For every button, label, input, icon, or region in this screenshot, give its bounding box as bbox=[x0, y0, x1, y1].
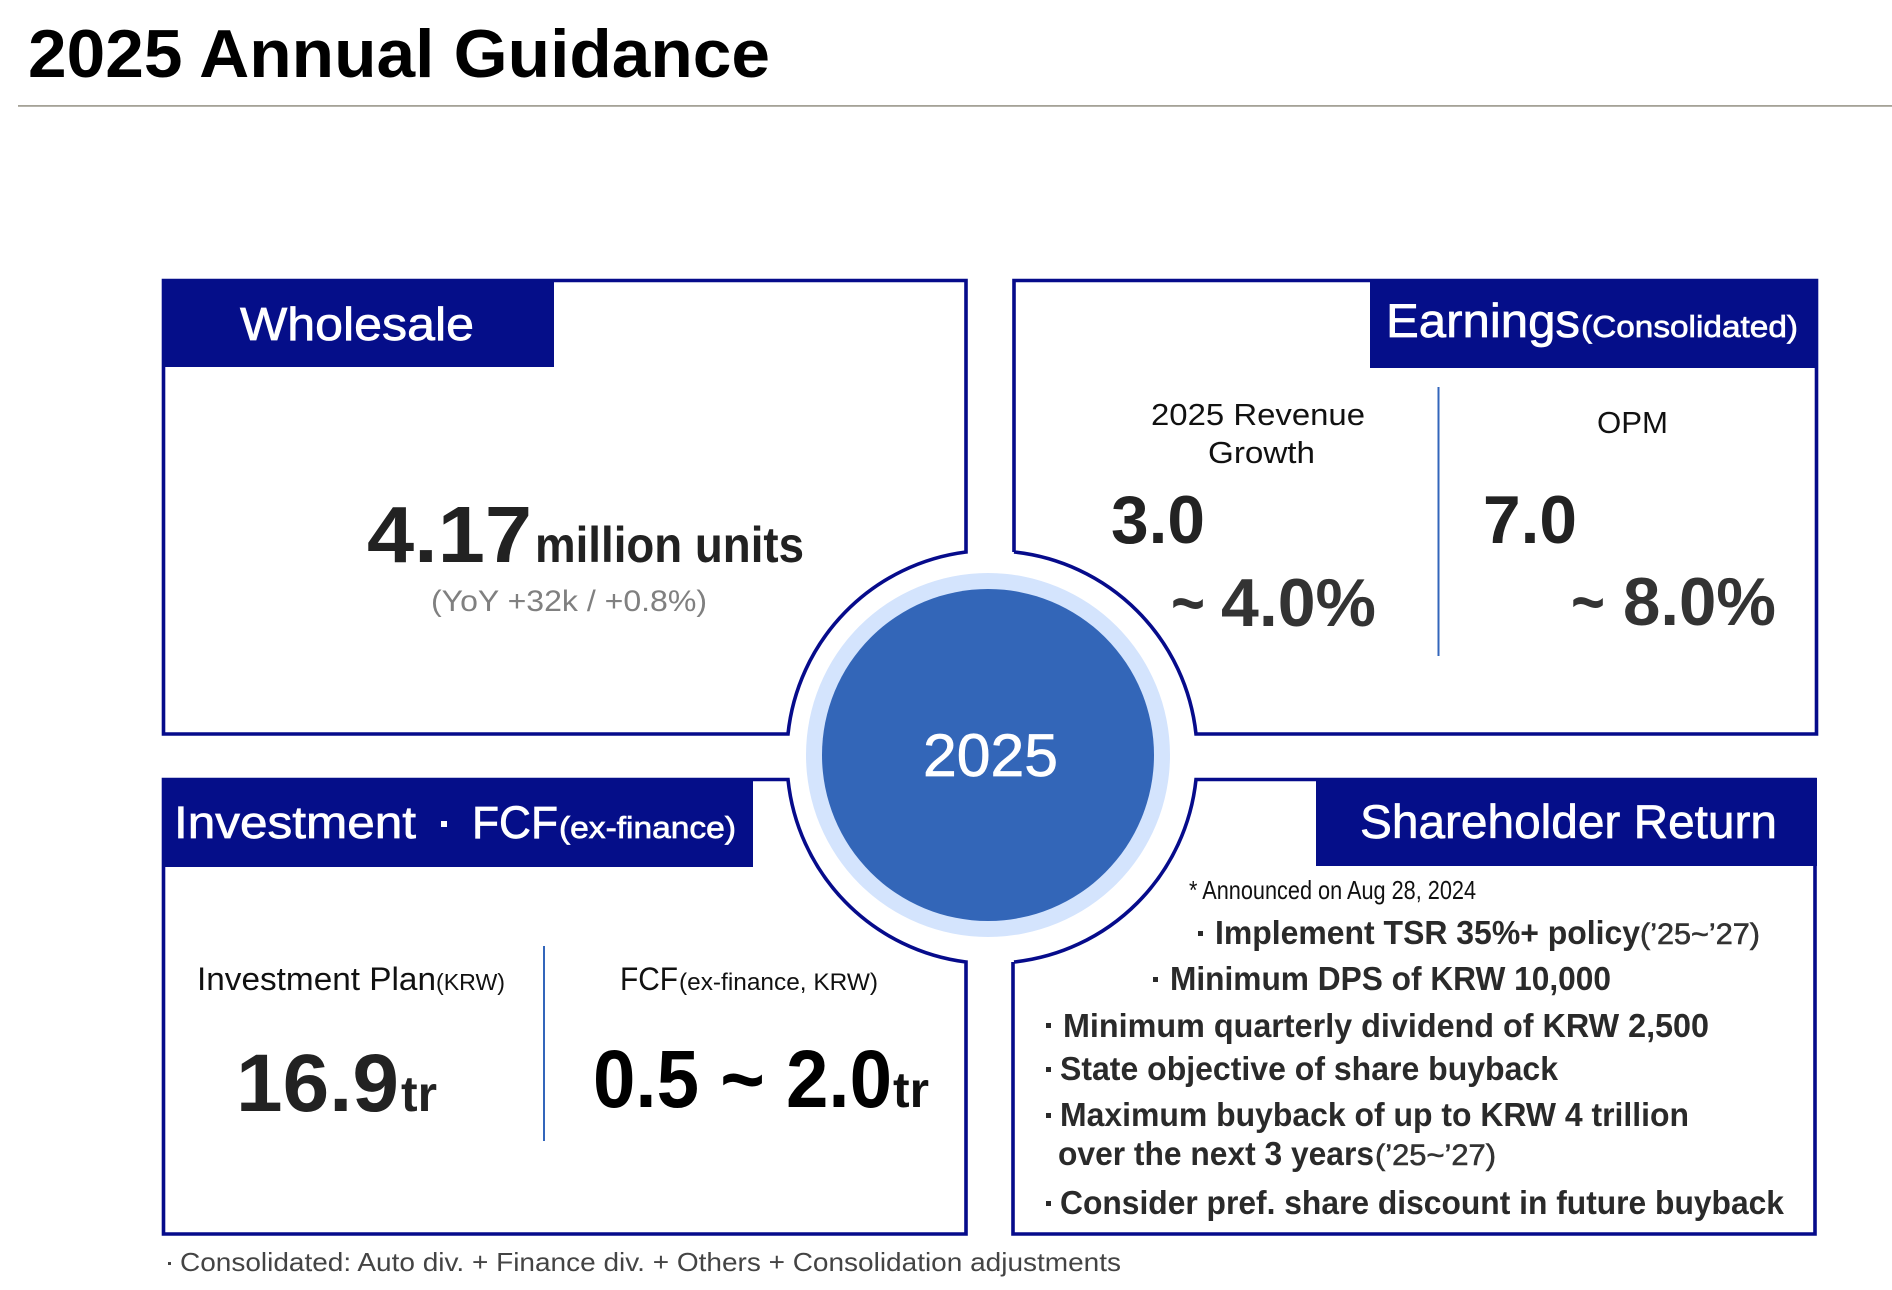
panel: earnings bbox=[1014, 279, 1818, 734]
earnings header bbox=[1370, 279, 1818, 368]
revenue growth label: 2025 Revenue bbox=[1151, 397, 1365, 432]
revenue growth value: 4.0% bbox=[1221, 565, 1376, 641]
revenue growth label bbox=[1151, 397, 1365, 470]
shareholder header: Shareholder Return bbox=[1360, 795, 1777, 848]
item: maximum buyback: over the next 3 years bbox=[1058, 1135, 1374, 1172]
OPM value: 7.0 bbox=[1483, 482, 1577, 558]
revenue growth value bbox=[1111, 482, 1376, 641]
FCF value: tr bbox=[893, 1062, 929, 1118]
investment header: FCF bbox=[472, 797, 558, 848]
investment plan value: 16.9 bbox=[236, 1038, 399, 1129]
investment plan label: (KRW) bbox=[436, 969, 505, 995]
FCF label: (ex-finance, KRW) bbox=[679, 969, 878, 996]
item: minimum DPS: Minimum DPS of KRW 10,000 bbox=[1170, 960, 1611, 997]
OPM value: ~ bbox=[1571, 564, 1605, 640]
investment header: (ex-finance) bbox=[559, 810, 736, 845]
item: quarterly dividend: Minimum quarterly dividend of KRW 2,500 bbox=[1063, 1007, 1709, 1044]
revenue growth value: 3.0 bbox=[1111, 482, 1205, 558]
revenue growth value: ~ bbox=[1171, 565, 1205, 641]
wholesale YoY note: (YoY +32k / +0.8%) bbox=[431, 585, 707, 618]
OPM label: OPM bbox=[1597, 405, 1668, 440]
investment plan label: Investment Plan bbox=[197, 961, 436, 997]
item: maximum buyback: (’25~’27) bbox=[1375, 1139, 1496, 1172]
revenue growth label: Growth bbox=[1208, 435, 1315, 470]
earnings header: Earnings bbox=[1386, 294, 1580, 347]
panel: investment and FCF bbox=[162, 778, 966, 1234]
wholesale value: million units bbox=[535, 517, 804, 573]
item: buyback objective: State objective of share buyback bbox=[1060, 1050, 1559, 1087]
item: TSR policy: Implement TSR 35%+ policy bbox=[1215, 914, 1641, 951]
wholesale value: 4.17 bbox=[367, 490, 532, 579]
panel: shareholder return bbox=[1013, 778, 1817, 1234]
investment plan value: tr bbox=[401, 1066, 437, 1122]
shareholder header bbox=[1316, 778, 1817, 866]
earnings header: (Consolidated) bbox=[1581, 309, 1798, 344]
item: preferred share discount: Consider pref. share discount in future buyback bbox=[1060, 1184, 1785, 1221]
item: maximum buyback bbox=[1046, 1096, 1689, 1172]
FCF label bbox=[620, 961, 878, 997]
OPM value: 8.0% bbox=[1623, 564, 1776, 640]
FCF label: FCF bbox=[620, 961, 678, 997]
center circle: 2025: 2025 bbox=[923, 722, 1058, 789]
announcement note: * Announced on Aug 28, 2024 bbox=[1189, 875, 1476, 905]
investment header bbox=[162, 778, 753, 867]
wholesale value bbox=[367, 490, 804, 579]
wholesale header: Wholesale bbox=[240, 298, 474, 350]
OPM value bbox=[1483, 482, 1776, 640]
wholesale header bbox=[162, 279, 554, 367]
footnote: Consolidated: Auto div. + Finance div. + Others + Consolidation adjustments bbox=[180, 1247, 1121, 1277]
FCF value: 0.5 ~ 2.0 bbox=[593, 1034, 892, 1125]
item: TSR policy: (’25~’27) bbox=[1640, 918, 1760, 951]
center circle: 2025 bbox=[806, 573, 1170, 937]
item: maximum buyback: Maximum buyback of up to KRW 4 trillion bbox=[1060, 1096, 1689, 1133]
panel: wholesale bbox=[162, 279, 966, 734]
investment header: Investment bbox=[174, 797, 417, 848]
title: 2025 Annual Guidance bbox=[28, 16, 770, 92]
